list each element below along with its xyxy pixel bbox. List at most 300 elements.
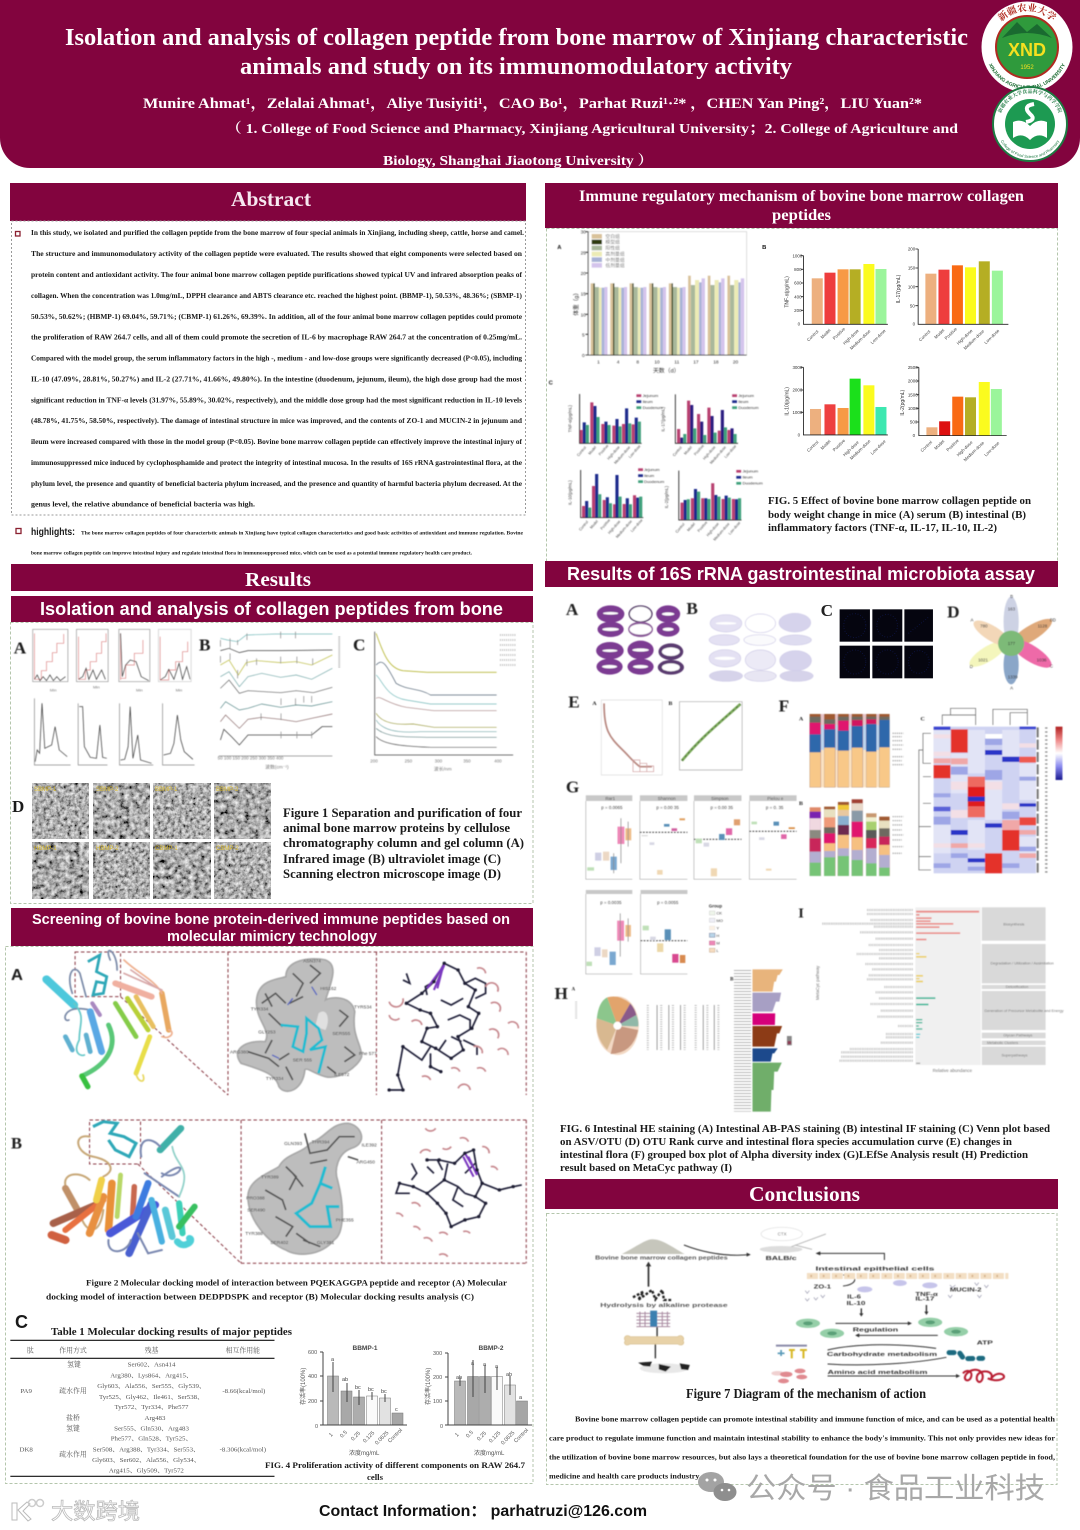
docking model A: Phe 577 [359, 1051, 377, 1057]
protein scribble [963, 1370, 1004, 1382]
figure 6C immunofluorescence: C [821, 601, 833, 620]
abstract heading [10, 183, 526, 221]
figure 6D Venn flower plot: 780 [980, 623, 988, 628]
conclusions text [549, 1414, 1056, 1480]
bar chart: IL-10 serum: 0 [798, 432, 801, 437]
figure 5B serum cytokine bar charts: B [762, 245, 766, 251]
bar chart: IL-17 intestine: Positive [693, 444, 705, 456]
heatmap dendrogram and key [919, 708, 1027, 870]
logo: Xinjiang Agricultural University: XND [1008, 40, 1046, 60]
bar chart: BBMP-2: a [495, 1364, 499, 1370]
highlights text block: highlights: [31, 527, 75, 538]
bar chart: BBMP-1 [299, 1345, 407, 1457]
poster title: Isolation and analysis of collagen peptide from bone marrow of Xinjiang characteristic [65, 25, 968, 51]
figure 6I MetaCyc pathway chart: Metabolic Clusters [987, 1041, 1018, 1045]
affiliations: Biology, Shanghai Jiaotong University ） [383, 153, 653, 169]
table 1 docking results: Arg380、Lys864、Arg415、 [110, 1372, 193, 1379]
figure 5A body weight chart: 中剂量组 [605, 256, 625, 263]
docking model A: GLY253 [258, 1029, 276, 1035]
heatmap column tints [934, 727, 1036, 853]
figure 1 caption [283, 806, 524, 881]
figure 5A body weight chart: 1 [597, 359, 600, 365]
bar chart: IL-17 serum [896, 247, 1008, 327]
figure 7 mechanism diagram: ZO-1 [814, 1285, 832, 1291]
docking model B: SER402 [270, 1240, 289, 1246]
group axis labels: Low-dose [869, 328, 887, 345]
bar chart: TNF-alpha intestine: Medium-dose [613, 445, 631, 465]
peptide powder icon [622, 1239, 685, 1254]
bar chart: TNF-alpha intestine: Duodenum [643, 405, 663, 410]
membrane transporters [771, 1346, 807, 1383]
docking model B: TYR388 [245, 1231, 263, 1237]
figure 6G alpha diversity box plots [566, 778, 797, 879]
figure 6D Venn flower plot: BD [1050, 617, 1056, 622]
panel: figure 1 [10, 622, 533, 904]
figure 1 caption: Infrared image (B) ultraviolet image (C) [283, 852, 501, 866]
bar chart: IL-2 intestine: High-dose [706, 522, 720, 537]
box plot group legend [709, 903, 723, 953]
bar chart: BBMP-1: 浓度mg/mL [349, 1449, 380, 1457]
figure 1B infrared spectra: B [199, 636, 211, 655]
highlights text block [16, 527, 523, 556]
immune mechanism heading [545, 183, 1058, 228]
figure 5A body weight chart [557, 230, 747, 375]
figure 6D Venn flower plot: 1021 [978, 657, 989, 662]
figure 6B AB-PAS staining: B [686, 599, 698, 618]
table 1 docking results: Tyr572、Tyr334、Phe577 [115, 1404, 189, 1411]
docking model A: HIS162 [320, 986, 337, 992]
figure 6G alpha diversity box plots: p = 0. 35 [766, 805, 784, 810]
figure 6G alpha diversity box plots: Shannon [658, 796, 676, 801]
screening section heading: Screening of bovine bone protein-derived immune peptides based on [32, 912, 510, 928]
bar chart: TNF-alpha serum [785, 253, 888, 327]
figure 6G alpha diversity box plots: p = 0.00 35 [656, 805, 679, 810]
bar chart: IL-2 intestine: IL-2(pg/mL) [664, 485, 669, 508]
abstract body text: 50.53%, 50.62%; (HBMP-1) 69.04%, 59.71%; (CBMP-1) 61.26%, 69.39%. In addition, all of the four animal bone marrow collagen peptides could promote [31, 314, 522, 321]
figure 7 mechanism diagram: Bovine bone marrow collagen peptides [595, 1255, 728, 1261]
bar chart: IL-10 intestine: Medium-dose [615, 519, 633, 539]
poster title: animals and study on its immunomodulatory activity [240, 54, 792, 80]
microbiota section heading [545, 561, 1058, 587]
bar chart: IL-2 serum: 1500 [908, 392, 918, 397]
figure 1D electron microscope images: CBMP-2 [216, 846, 239, 852]
group axis labels [806, 326, 1001, 462]
group axis labels: Model [933, 439, 945, 451]
conclusions text: care product to regulate immune function and maintain intestinal stability to enhance the body's immunity. This not only provides new ideas for [549, 1434, 1056, 1442]
bar chart: BBMP-1: 0 [315, 1424, 318, 1430]
figure 1D electron microscope images: BBMP-2 [216, 787, 239, 793]
panel: conclusions [546, 1214, 1057, 1484]
epithelial cell row [807, 1267, 1008, 1285]
interaction map B [396, 1128, 522, 1257]
abstract body text: phylum level, the presence and quantity of beneficial bacteria phylum increased, and the presence and quantity of harmful bacteria phylum decreased. At the [31, 481, 522, 488]
bar chart: IL-2 serum: 1000 [908, 406, 918, 411]
bar chart: BBMP-1: 600 [308, 1350, 317, 1356]
bar chart: IL-17 serum: 0 [913, 322, 916, 327]
bar chart: BBMP-2: a [483, 1362, 487, 1368]
figure 6F stacked bar charts [779, 697, 903, 876]
figure 1A chromatograms: Min [93, 684, 100, 689]
figure 1C ultraviolet spectra: 波长/nm [434, 766, 452, 773]
docking model B: THR394 [312, 1139, 330, 1145]
figure 6D Venn flower plot: 163 [1008, 607, 1016, 612]
figure 5A body weight chart: 18 [713, 359, 719, 365]
figure 5A body weight chart: 空白组 [605, 233, 620, 240]
contact information: Contact Information： parhatruzi@126.com [319, 1503, 647, 1520]
figure 6F stacked bar charts: A [799, 717, 804, 723]
docking model B [11, 1120, 526, 1263]
figure 1D electron microscope images [12, 783, 271, 899]
figure 6H LEfSe cladogram: H [554, 984, 568, 1003]
bar chart: BBMP-1: a [331, 1357, 335, 1363]
bar chart: IL-17 serum: 100 [908, 284, 916, 289]
figure 6E rank and accumulation curves: A [592, 701, 597, 707]
figure 5A body weight chart: 阳性组 [605, 245, 620, 252]
figure 6I MetaCyc pathway chart: Degradation / Utilization / Assimilation [990, 961, 1054, 965]
figure 1C ultraviolet spectra: 300 [435, 759, 443, 764]
bar chart: IL-17 intestine: Control [672, 446, 683, 457]
bar chart: BBMP-1: BBMP-1 [353, 1345, 378, 1352]
figure 2 caption: Figure 2 Molecular docking model of interaction between PQEKAGGPA peptide and receptor (A) Molecular [86, 1278, 508, 1288]
bar chart: IL-17 intestine: Duodenum [738, 405, 759, 410]
figure 6G alpha diversity box plots: p = 0.0065 [601, 805, 623, 810]
box plot group legend: Group [709, 903, 722, 908]
figure 6B AB-PAS staining [686, 599, 813, 681]
stacked bars A [810, 714, 890, 787]
bar chart: BBMP-2: 浓度mg/mL [474, 1449, 505, 1457]
group axis labels: Model [820, 439, 832, 451]
figure 5B serum cytokine bar charts [762, 245, 1008, 462]
bar chart: IL-2 intestine: Model [686, 522, 696, 532]
box plot group legend: L [716, 948, 719, 953]
group axis labels: High-dose [956, 440, 974, 457]
collagen fibres icon [636, 1311, 670, 1327]
figure 6I MetaCyc pathway chart: I [798, 906, 804, 922]
ribbon protein A [46, 951, 172, 1087]
figure 4 caption: cells [367, 1472, 384, 1482]
figure 1C ultraviolet spectra: 350 [463, 759, 471, 764]
figure 6E rank and accumulation curves: B [668, 701, 673, 707]
figure 5A body weight chart: 模型组 [605, 239, 620, 246]
figure 5A body weight chart: 4 [617, 359, 620, 365]
docking model A: TYR334 [266, 1076, 284, 1082]
bar chart: IL-2 serum: 2500 [908, 365, 918, 370]
figure 7 mechanism diagram: IL-6 [847, 1294, 861, 1300]
screening section heading [11, 908, 533, 946]
docking model B: PRO388 [246, 1195, 265, 1201]
figure 6F stacked bar charts: F [779, 697, 789, 716]
panel: abstract [10, 183, 526, 515]
figure 1A chromatograms: Min [50, 688, 57, 693]
bar chart: TNF-alpha intestine: Ileum [643, 399, 653, 404]
abstract body text: significant reduction in TNF-α levels (31.97%, 55.89%, 30.02%, respectively), and the middle dose group had the most significant reduction in IL-10 levels [31, 397, 522, 404]
abstract body text: protein content and antioxidant activity. The four animal bone marrow collagen peptide purifications showed typical UV and infrared absorption peaks of [31, 272, 523, 279]
group axis labels: Medium-dose [962, 328, 986, 351]
figure 6D Venn flower plot: 1036 [1037, 657, 1047, 662]
figure 6H LEfSe cladogram [554, 984, 639, 1055]
docking model B: ARG450 [356, 1159, 375, 1165]
figure 5A body weight chart: 低剂量组 [605, 262, 625, 269]
highlights text block: The bone marrow collagen peptides of four characteristic animals in Xinjiang have typical collagen characteristics and good basic activities of antioxidant and immune regulation. Bovine [81, 532, 523, 536]
docking model A: ASN374 [303, 959, 321, 965]
logo: Xinjiang Agricultural University: 1952 [1020, 65, 1034, 71]
abstract body text: The structure and immunomodulatory activity of the collagen peptide were evaluated. The results showed that eight components were selected based on [31, 251, 522, 258]
box plot group legend: Y [716, 926, 719, 931]
logo: College of Food Science and Pharmacy: College of Food Science and Pharmacy [1001, 140, 1060, 158]
figure 1D electron microscope images: CBMP-1 [155, 846, 178, 852]
figure 6F stacked bar charts: B [799, 801, 803, 807]
docking model A: SER 555 [293, 1058, 312, 1064]
abstract body text [31, 230, 524, 509]
bar chart: TNF-alpha intestine: Low-dose [628, 444, 642, 459]
figure 5A body weight chart: 8 [636, 359, 639, 365]
docking model B: ILE392 [362, 1143, 377, 1149]
hydrolysed peptides icon [633, 1290, 673, 1300]
table 1 docking results: 氢键 [66, 1423, 80, 1432]
screening section heading: molecular mimicry technology [167, 929, 377, 945]
bar chart: BBMP-2: 0.0625 [500, 1430, 516, 1446]
figure 6I MetaCyc pathway chart: Relative abundance [933, 1068, 973, 1073]
bar chart: BBMP-2: Control [513, 1428, 530, 1444]
bar chart: BBMP-1: Control [387, 1428, 404, 1444]
figure 6D Venn flower plot: A [970, 617, 974, 622]
immune mechanism heading: Immune regulatory mechanism of bovine bone marrow collagen [579, 188, 1024, 205]
table 1 docking results: -8.66(kcal/mol) [222, 1388, 265, 1395]
figure 1A chromatograms [14, 629, 195, 765]
bar chart: BBMP-1: 0.25 [350, 1431, 362, 1442]
bar chart: TNF-alpha serum: 800 [794, 267, 802, 272]
figure 1 caption: Figure 1 Separation and purification of four [283, 806, 522, 820]
figure 6D Venn flower plot: D [947, 603, 960, 622]
cytokine blobs [857, 1280, 937, 1292]
group axis labels: Model [820, 328, 832, 340]
table 1 docking results: Arg415、Gly509、Tyr572 [109, 1468, 185, 1475]
bar chart: TNF-alpha serum: 1000 [792, 253, 803, 258]
panel: molecular docking [6, 946, 533, 1484]
figure 5 caption [768, 496, 1031, 534]
bar chart: IL-2 intestine [664, 469, 763, 542]
figure 6H LEfSe cladogram: A [572, 988, 576, 993]
table 1 docking results: 疏水作用 [59, 1449, 87, 1458]
conclusions text: Bovine bone marrow collagen peptide can promote intestinal stability and immune function of mice, and can be used as a potential health [575, 1414, 1056, 1424]
figure 1C ultraviolet spectra: 250 [405, 759, 413, 764]
immune cells [796, 1318, 968, 1338]
bar chart: BBMP-2: 1 [454, 1432, 461, 1438]
arrows [648, 1245, 958, 1376]
group axis labels: Control [919, 440, 933, 453]
bar chart: IL-17 intestine [661, 393, 759, 465]
figure 6 caption [560, 1124, 1050, 1174]
docking model B: B [11, 1135, 22, 1152]
bar chart: BBMP-1: 400 [308, 1374, 317, 1380]
figure 6G alpha diversity box plots: Pielou e [767, 796, 784, 801]
table 1 docking results: PA9 [20, 1388, 33, 1395]
figure 1A chromatograms: Min [136, 688, 143, 693]
page header banner [0, 0, 1080, 169]
abstract body text: genus level, the relative abundance of beneficial bacteria was high. [31, 502, 255, 509]
bar chart: IL-17 intestine: Ileum [738, 399, 749, 404]
figure 2 caption [46, 1278, 508, 1302]
figure 6F heatmap [919, 708, 1062, 873]
table 1 docking results: 肽 [27, 1345, 34, 1354]
docking model A: TYR334 [251, 1007, 269, 1013]
figure 5A body weight chart: 体重（g） [572, 290, 580, 316]
logo: College of Food Science and Pharmacy [992, 86, 1068, 162]
figure 1D electron microscope images: HBMP-1 [34, 846, 57, 852]
bar chart: BBMP-2: 存活率(100%) [424, 1368, 432, 1405]
figure 6G alpha diversity box plots: G [566, 778, 579, 797]
group axis labels: Control [918, 329, 931, 342]
bar chart: BBMP-1: 0.125 [362, 1430, 376, 1444]
bar chart: TNF-alpha intestine: Positive [598, 444, 610, 456]
figure 1C ultraviolet spectra [353, 632, 517, 773]
bar chart: IL-10 intestine: IL-10(pg/mL) [568, 480, 573, 505]
bar chart: TNF-alpha intestine: Jejunum [643, 393, 659, 398]
bar chart: IL-2 serum: 500 [910, 420, 918, 425]
figure 5A body weight chart: 高剂量组 [605, 251, 625, 258]
figure 6I MetaCyc pathway chart: Glycan Pathways [1003, 1034, 1033, 1038]
group axis labels: Medium-dose [849, 328, 872, 351]
ATP molecule [949, 1353, 983, 1359]
bar chart: TNF-alpha intestine [568, 393, 663, 465]
group axis labels: Control [806, 440, 820, 453]
bar chart: TNF-alpha serum: 400 [794, 294, 802, 299]
figure 6G alpha diversity box plots: Rar1 [605, 796, 616, 801]
bar chart: BBMP-2: 100 [433, 1399, 442, 1405]
bar chart: BBMP-2: 200 [433, 1375, 442, 1381]
figure 1 caption: animal bone marrow proteins by cellulose [283, 821, 510, 835]
bar chart: IL-17 intestine: Jejunum [738, 393, 755, 398]
figure 5A body weight chart: 30 [581, 230, 586, 236]
bar chart: IL-2 intestine: Jejunum [743, 469, 759, 474]
group axis labels: Positive [944, 326, 959, 341]
figure 1A chromatograms: Min [176, 688, 182, 693]
figure 5A body weight chart: 5 [582, 332, 585, 338]
table 1 docking results: Phe577、Gln528、Tyr525、 [111, 1436, 192, 1443]
table 1 docking results: Ser555、Gln530、Arg483 [114, 1425, 190, 1432]
logo: Xinjiang Agricultural University [982, 2, 1072, 90]
figure 1 caption: chromatography column and gel column (A) [283, 836, 524, 850]
bar chart: BBMP-1: bc [381, 1389, 387, 1395]
results heading: Results [245, 569, 311, 591]
figure 5C intestinal cytokine bar charts [549, 380, 763, 542]
bar chart: BBMP-1: 1 [328, 1432, 335, 1438]
table 1 docking results: Ser602、Asn414 [128, 1362, 176, 1369]
figure 1C ultraviolet spectra: 400 [494, 759, 502, 764]
figure 4 caption: FIG. 4 Proliferation activity of different components on RAW 264.7 [265, 1460, 526, 1470]
bar chart: IL-2 intestine: Low-dose [728, 521, 741, 536]
bar chart: TNF-alpha serum: 200 [794, 308, 802, 313]
mouse and CTX [760, 1227, 826, 1253]
figure 7 mechanism diagram: Amino acid metabolism [828, 1370, 927, 1376]
abstract heading: Abstract [231, 187, 311, 211]
figure 6I MetaCyc pathway chart [798, 906, 1064, 1073]
bar chart: BBMP-1: bc [355, 1385, 361, 1391]
figure 6I MetaCyc pathway chart: Biosynthesis [1003, 922, 1025, 926]
figure 6E rank and accumulation curves: E [568, 693, 580, 711]
bar chart: BBMP-2: 0 [440, 1424, 443, 1430]
figure 2 caption: docking model of interaction between DEDPDSPK and receptor (B) Molecular docking results analysis (C) [46, 1292, 474, 1302]
bar chart: IL-10 intestine: Control [578, 520, 589, 532]
isolation section heading: Isolation and analysis of collagen peptides from bone [40, 599, 503, 619]
figure 1 caption: Scanning electron microscope image (D) [283, 867, 501, 881]
figure 6G lower box plots and legend: p = 0.0035 [600, 900, 622, 905]
box plot group legend: H [716, 933, 719, 938]
figure 1D electron microscope images: HBMP-2 [96, 846, 119, 852]
table 1 docking results [10, 1340, 274, 1476]
figure 6A HE staining: A [566, 600, 579, 619]
bar chart: BBMP-2: ab [506, 1372, 512, 1378]
docking model A: ARG380 [230, 1049, 249, 1055]
logo: Xinjiang Agricultural University: 新疆农业大学 [998, 3, 1056, 22]
table 1 docking results: 相互作用能 [226, 1345, 260, 1354]
bar chart: IL-17 serum: 50 [910, 303, 915, 308]
figure 5A body weight chart: 11 [674, 359, 680, 365]
bar chart: IL-10 intestine: Jejunum [644, 467, 660, 472]
figure 5A body weight chart: 17 [693, 359, 699, 365]
group axis labels: Model [933, 328, 945, 340]
bone icon [624, 1336, 684, 1345]
bar chart: IL-10 serum: IL-10(pg/mL) [785, 387, 791, 416]
cow icon [638, 1362, 690, 1373]
abstract body text: (48.78%, 41.75%, 58.50%, respectively). The damage of intestinal structure in mice was improved, and the contents of ZO-1 and MUCIN-2 in jejunum and [31, 418, 522, 425]
figure 6A HE staining [566, 600, 684, 675]
figure 6H LDA bar chart [730, 969, 792, 1112]
bar chart: IL-17 intestine: IL-17(pg/mL) [661, 406, 666, 432]
figure 6D Venn flower plot: D [970, 664, 973, 669]
bar chart: IL-17 intestine: Low-dose [724, 444, 737, 459]
figure 7 mechanism diagram: MUCIN-2 [950, 1287, 982, 1293]
table 1 docking results: 疏水作用 [59, 1386, 87, 1395]
watermark: WeChat account: 公众号 · 食品工业科技 [746, 1472, 1045, 1505]
group axis labels: Positive [832, 438, 847, 452]
figure 5A body weight chart: 10 [581, 312, 586, 318]
figure 1D electron microscope images: SBMP-2 [96, 787, 119, 793]
figure 6D Venn flower plot: A [1010, 685, 1013, 690]
bar chart: IL-10 intestine: Low-dose [630, 518, 644, 533]
group axis labels: Positive [832, 326, 847, 341]
panel letter C: C [15, 1312, 28, 1332]
table 1 docking results: Gly603、Ala556、Ser555、Gly539、 [97, 1383, 206, 1390]
bar chart: IL-17 serum: 150 [908, 266, 916, 271]
highlights text block: bone marrow collagen peptide can improve intestinal injury and regulate intestinal flora in immunosuppressed mice, which can be used as a potential immune regulatory health care product. [31, 552, 472, 556]
figure 6I MetaCyc pathway chart: Generation of Precursor Metabolite and Energy [984, 1009, 1064, 1013]
bar chart: IL-2 intestine: Ileum [743, 475, 753, 480]
bar chart: IL-17 intestine: High-dose [702, 445, 716, 461]
bar chart: BBMP-2: BBMP-2 [479, 1345, 504, 1352]
watermark: big data cross-border logo: 大数跨境 [51, 1499, 140, 1524]
figure 5 caption: inflammatory factors (TNF-α, IL-17, IL-10, IL-2) [768, 523, 998, 534]
bar chart: IL-17 serum: 200 [908, 247, 916, 252]
microbiota section heading: Results of 16S rRNA gastrointestinal microbiota assay [567, 564, 1035, 584]
figure 4 caption [265, 1460, 526, 1482]
logo: Xinjiang Agricultural University: XINJIANG AGRICULTURAL UNIVERSITY [988, 63, 1065, 88]
figure 6E rank and accumulation curves [568, 693, 742, 775]
figure 1B infrared spectra: 50 100 150 200 250 300 350 400 [218, 755, 284, 760]
docking model B: GLN393 [284, 1141, 302, 1147]
peptide sticks A [88, 955, 107, 995]
figure 6 caption: intestinal flora (F) grouped box plot of Alpha diversity index (G)LEfSe Analysis result (H) Prediction [560, 1150, 1028, 1161]
bar chart: IL-10 serum: 2000 [792, 388, 803, 393]
docking model A: TYR534 [354, 1004, 372, 1010]
figure 6 caption: on ASV/OTU (D) OTU Rank curve and intestinal flora species accumulation curve (E) changes in [560, 1137, 1012, 1148]
surface blob B [248, 1123, 362, 1254]
figure 6D Venn flower plot [947, 594, 1056, 690]
table 1 docking results: Ser508、Arg388、Tyr334、Ser553、 [93, 1447, 200, 1454]
group axis labels: Medium-dose [962, 440, 986, 462]
immune mechanism heading: peptides [772, 207, 831, 224]
bar chart: IL-2 serum [900, 365, 1007, 438]
